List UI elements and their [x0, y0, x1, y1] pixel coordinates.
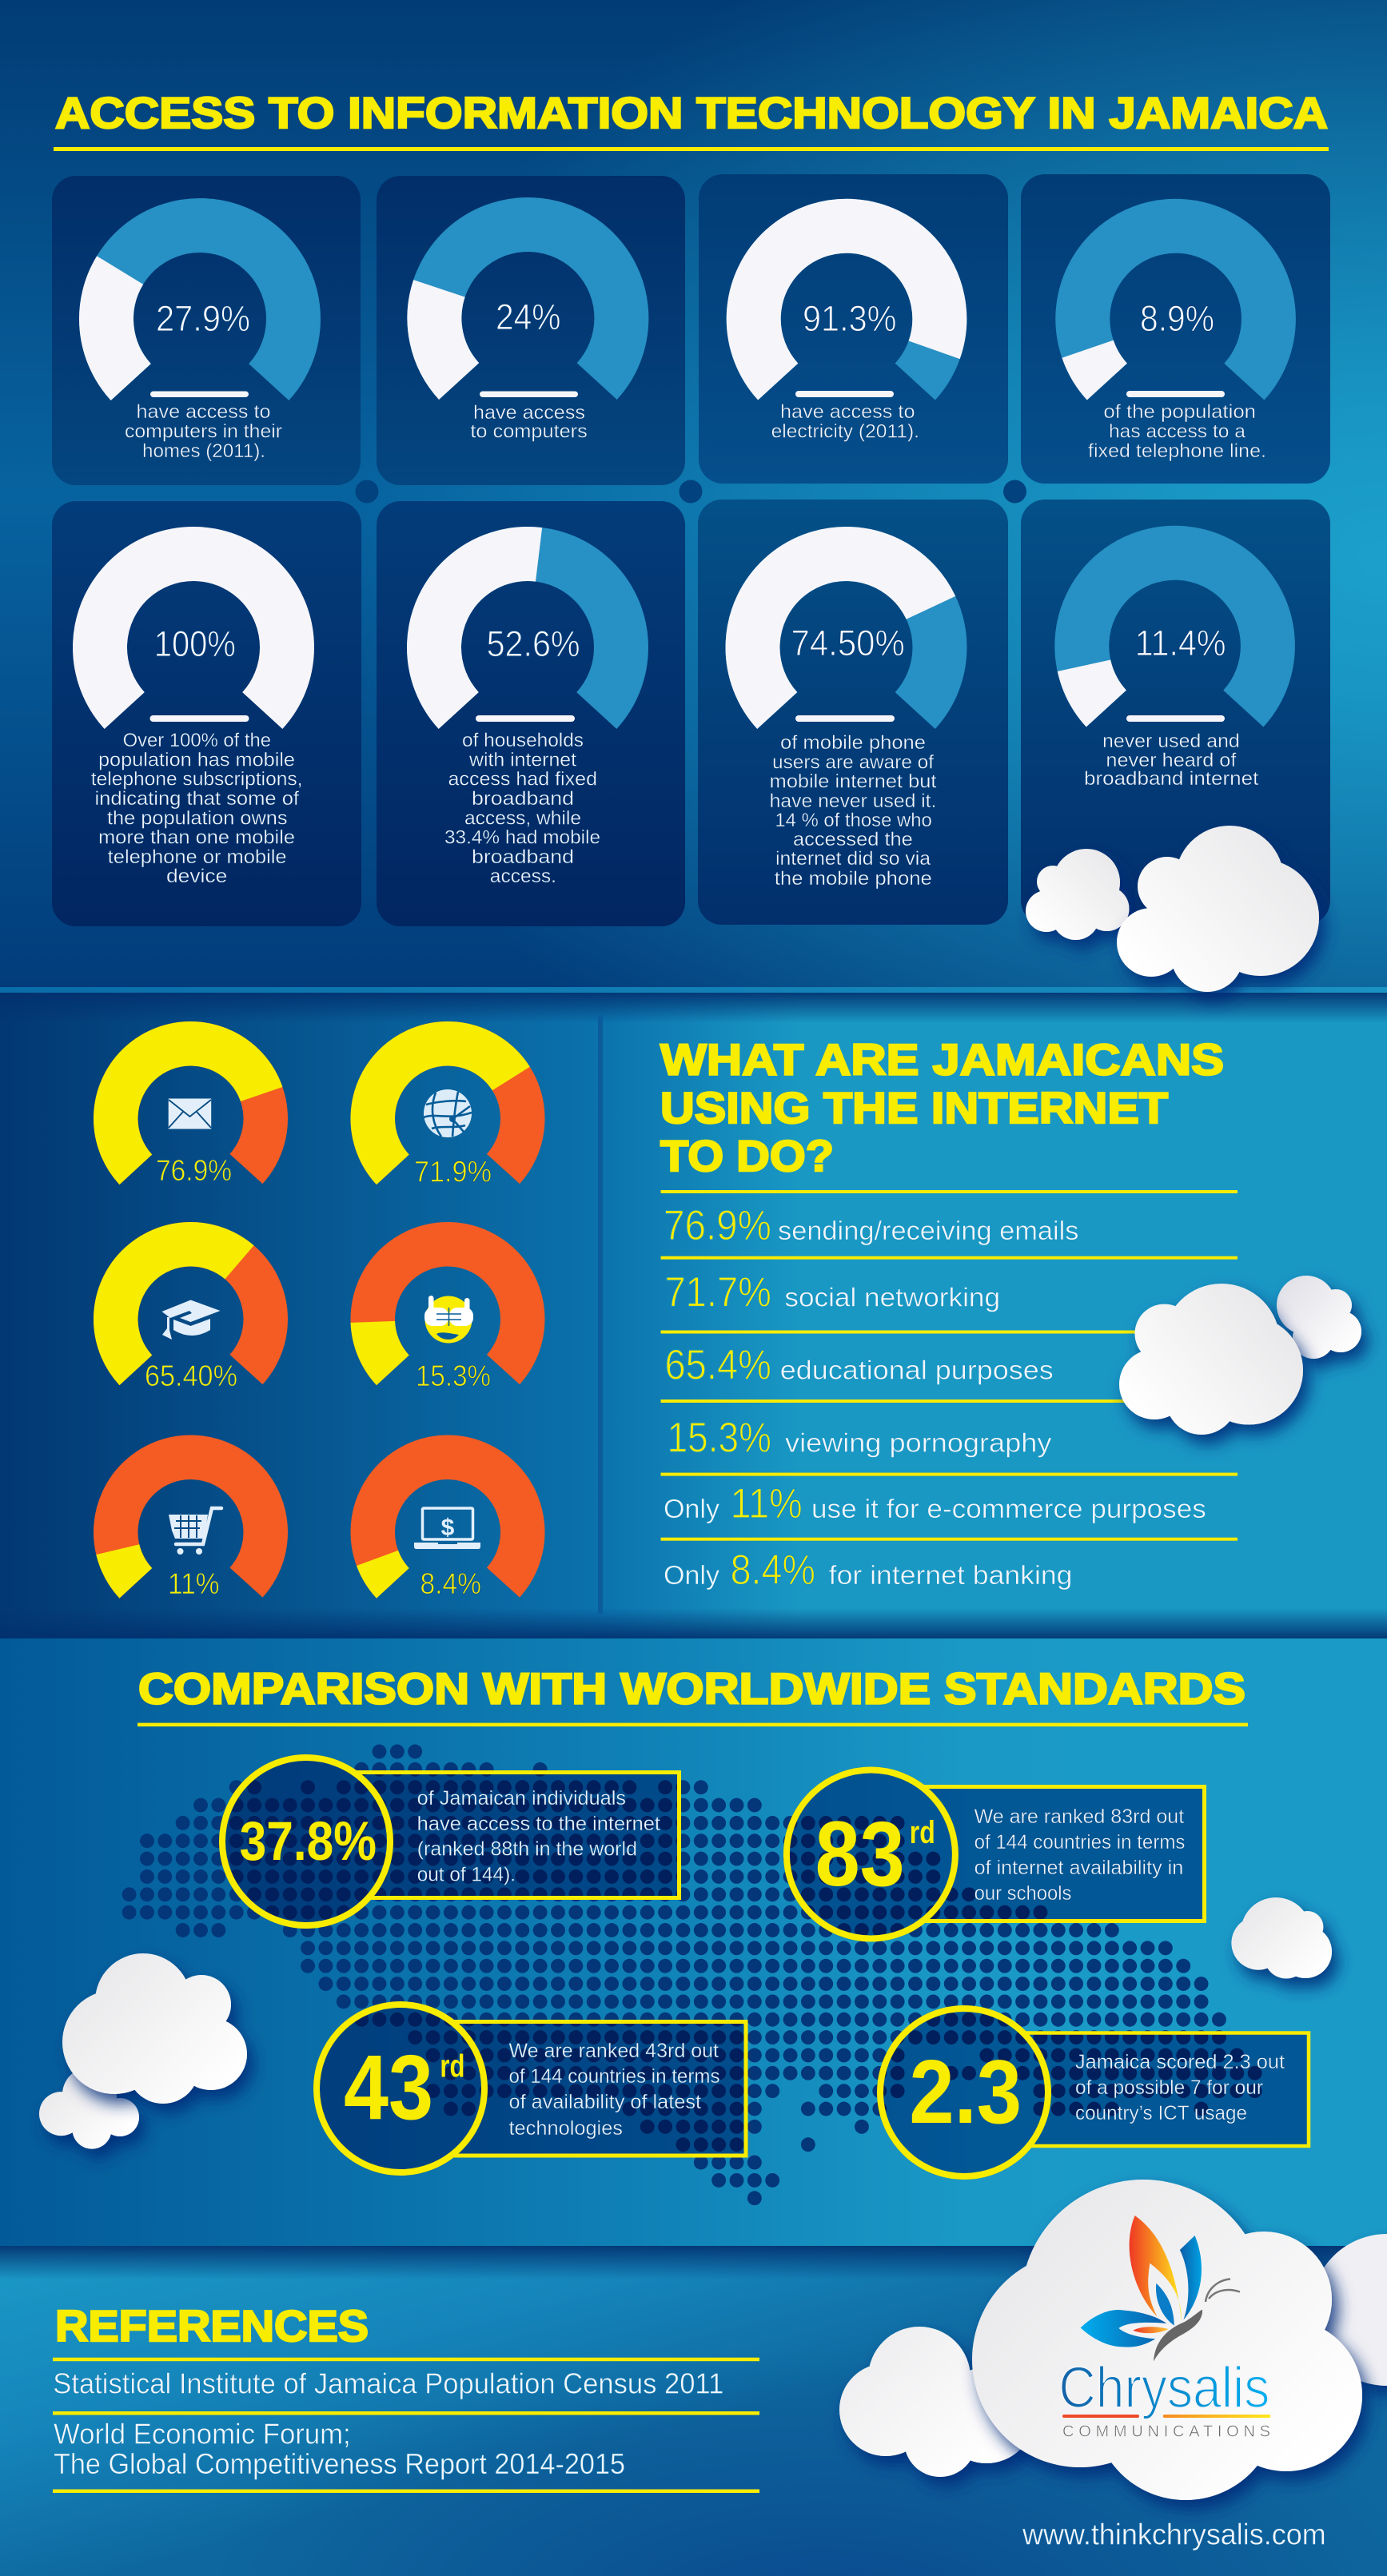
caption: 14 % of those who	[775, 810, 932, 831]
caption	[770, 732, 937, 890]
row: 71.7% social networking	[665, 1268, 1000, 1316]
callout text: have access to the internet	[417, 1813, 660, 1835]
row: 76.9% emails: 76.9%	[664, 1202, 771, 1249]
row: 65.4% educational purposes: educational purposes	[780, 1356, 1054, 1385]
value: 76.9%	[156, 1154, 232, 1187]
callout text: technologies	[508, 2117, 623, 2140]
row: 15.3% viewing pornography: 15.3%	[668, 1415, 771, 1461]
list: internet uses	[660, 1190, 1238, 1594]
caption: have access to	[136, 401, 270, 423]
caption	[125, 401, 282, 462]
cloud: large, left of comparison	[62, 1953, 247, 2104]
callout text	[974, 1806, 1185, 1905]
caption: computers in their	[125, 421, 282, 443]
caption: access, while	[464, 807, 581, 829]
row: 65.4% educational purposes	[665, 1342, 1054, 1389]
heading: what are Jamaicans using the internet to do: WHAT ARE JAMAICANS	[660, 1035, 1224, 1085]
callout text: of Jamaican individuals	[417, 1787, 626, 1810]
caption	[91, 730, 303, 887]
value: 52.6%: 52.6%	[487, 623, 580, 664]
caption: broadband internet	[1084, 768, 1259, 790]
gauge: 8.4% internet banking	[342, 1427, 553, 1638]
row: 15.3% viewing pornography: viewing pornography	[785, 1427, 1052, 1458]
panel: 24% computers	[377, 176, 685, 485]
icon: laptop with dollar	[414, 1508, 480, 1549]
caption: have never used it.	[770, 790, 936, 812]
gauge: 27.9%	[68, 187, 332, 451]
value: 71.9%	[414, 1156, 492, 1188]
panel: 52.6% fixed broadband	[377, 501, 685, 926]
callout: 83rd schools: rd	[910, 1815, 935, 1850]
connector dots between cards	[355, 480, 1026, 504]
callout: 43rd latest technologies: 43	[344, 2037, 433, 2139]
row: 71.7% social networking: social networking	[784, 1282, 1000, 1312]
website url: www.thinkchrysalis.com	[1022, 2518, 1326, 2551]
row: only 8.4% internet banking: 8.4%	[731, 1547, 815, 1594]
callout: 37.8% internet access	[219, 1754, 681, 1929]
cloud: left of logo cloud	[839, 2327, 1034, 2477]
panel: 27.9% computers in homes	[52, 176, 361, 485]
callout text: of a possible 7 for our	[1075, 2076, 1263, 2099]
references list	[53, 2358, 759, 2493]
caption: of households	[462, 730, 584, 751]
icon: hands over globe	[424, 1296, 473, 1343]
caption: never used and	[1102, 731, 1240, 752]
callout text	[1075, 2051, 1285, 2124]
value: 11.4%: 11.4%	[1135, 623, 1226, 663]
heading: what are Jamaicans using the internet to do	[660, 1035, 1224, 1181]
row: only 8.4% internet banking	[664, 1547, 1073, 1594]
callout: 2.3 ICT usage	[877, 2005, 1310, 2180]
row: 76.9% emails	[664, 1202, 1079, 1249]
caption	[1088, 401, 1266, 462]
panel: 100% mobile subscriptions	[52, 501, 361, 926]
gauge: 52.6%	[396, 516, 660, 779]
callout: 43rd latest technologies: rd	[440, 2049, 464, 2084]
references list: World Economic Forum;	[54, 2418, 351, 2451]
references list: Statistical Institute of Jamaica Population Census 2011	[53, 2367, 723, 2399]
value: 100%: 100%	[154, 623, 236, 664]
callout text: of 144 countries in terms	[974, 1831, 1185, 1853]
gauge: 76.9% email	[85, 1013, 297, 1224]
callout text: (ranked 88th in the world	[417, 1838, 637, 1861]
gauge: 11% e-commerce	[85, 1427, 297, 1638]
caption: more than one mobile	[98, 827, 295, 849]
value: 24%: 24%	[496, 297, 561, 337]
cloud: small, left of comparison	[39, 2068, 139, 2149]
caption: access had fixed	[448, 769, 597, 790]
cloud: large, bottom of access section	[1117, 826, 1319, 992]
caption: fixed telephone line.	[1088, 440, 1266, 462]
row: 65.4% educational purposes: 65.4%	[665, 1342, 771, 1389]
callout: 83rd schools	[783, 1766, 1206, 1942]
caption	[771, 401, 919, 442]
caption: homes (2011).	[142, 440, 265, 462]
callout text: of internet availability in	[974, 1857, 1183, 1879]
icon: envelope	[169, 1098, 211, 1129]
cloud: small, internet section	[1277, 1276, 1361, 1359]
value: 15.3%	[416, 1360, 491, 1392]
caption: indicating that some of	[94, 788, 299, 810]
panel: 11.4% never used broadband	[1021, 500, 1330, 925]
caption: population has mobile	[98, 749, 295, 770]
logo wordmark: Chrysalis	[1058, 2356, 1269, 2420]
callout: 37.8% internet access: 37.8%	[240, 1810, 377, 1872]
gauge: 15.3% pornography	[342, 1213, 553, 1425]
title: access to information technology: ACCESS TO INFORMATION TECHNOLOGY IN JAMAICA	[55, 88, 1328, 137]
value: 74.50%: 74.50%	[791, 623, 905, 663]
value: 8.4%	[420, 1567, 481, 1600]
caption	[470, 402, 588, 443]
caption: has access to a	[1109, 420, 1246, 442]
row: only 11% e-commerce: 11%	[731, 1480, 803, 1527]
gauge: 24%	[396, 186, 660, 450]
caption: broadband	[472, 788, 574, 810]
caption	[444, 730, 600, 887]
callout text: of 144 countries in terms	[508, 2065, 719, 2088]
caption: mobile internet but	[770, 770, 937, 793]
gauge: 100%	[62, 516, 325, 779]
row: only 11% e-commerce: use it for e-commerce purposes	[811, 1494, 1206, 1523]
logo: Chrysalis Communications: COMMUNICATIONS	[1062, 2423, 1270, 2441]
caption: the mobile phone	[775, 868, 932, 890]
caption: of mobile phone	[780, 732, 926, 754]
caption: to computers	[470, 421, 588, 443]
callout text	[508, 2040, 719, 2140]
heading: what are Jamaicans using the internet to do: TO DO?	[660, 1131, 834, 1181]
value: 91.3%: 91.3%	[803, 298, 897, 339]
caption: device	[166, 866, 227, 887]
caption: with internet	[468, 749, 576, 770]
caption: Over 100% of the	[123, 730, 271, 751]
callout: 43rd latest technologies	[313, 2001, 748, 2176]
map: dotted Jamaica	[130, 1752, 1255, 2198]
caption: broadband	[472, 846, 574, 868]
cloud: small, right of comparison	[1231, 1897, 1332, 1979]
cloud: right behind logo cloud	[1311, 2234, 1387, 2386]
callout text: We are ranked 83rd out	[974, 1806, 1184, 1828]
icon: laptop with dollar: $	[441, 1515, 455, 1541]
gauge: 65.40% education	[85, 1213, 297, 1425]
gauge: 11.4%	[1043, 515, 1306, 777]
row: 71.7% social networking: 71.7%	[665, 1268, 771, 1316]
caption: the population owns	[107, 807, 288, 829]
caption: telephone or mobile	[108, 846, 287, 868]
row: only 8.4% internet banking: Only	[664, 1560, 720, 1590]
value: 8.9%: 8.9%	[1140, 298, 1214, 339]
caption: users are aware of	[772, 751, 934, 774]
caption: access.	[490, 866, 556, 887]
callout: 2.3 ICT usage: 2.3	[909, 2041, 1022, 2142]
caption: never heard of	[1106, 750, 1237, 771]
gauge: 71.9% social networking	[342, 1013, 553, 1224]
caption: have access	[473, 402, 585, 424]
cloud: logo cloud	[972, 2180, 1362, 2500]
callout text: Jamaica scored 2.3 out	[1075, 2051, 1285, 2073]
caption: of the population	[1103, 401, 1256, 423]
callout text: of availability of latest	[508, 2091, 701, 2113]
heading: comparison with worldwide standards: COMPARISON WITH WORLDWIDE STANDARDS	[138, 1664, 1246, 1714]
callout text: our schools	[974, 1882, 1071, 1905]
panel: 74.50% mobile internet awareness	[698, 500, 1008, 925]
caption: telephone subscriptions,	[91, 769, 303, 790]
caption: internet did so via	[775, 848, 931, 870]
caption: 33.4% had mobile	[444, 827, 600, 849]
callout text: country’s ICT usage	[1075, 2102, 1247, 2124]
icon: graduation cap	[161, 1300, 221, 1340]
icon: shopping cart	[169, 1508, 221, 1555]
value: 65.40%	[145, 1360, 237, 1392]
panel: 91.3% electricity	[699, 174, 1008, 484]
icon: butterfly	[1081, 2216, 1240, 2361]
gauge: 74.50%	[714, 516, 978, 779]
references list: The Global Competitiveness Report 2014-2015	[54, 2447, 625, 2480]
gauge: 8.9%	[1044, 188, 1307, 450]
callout: 83rd schools: 83	[815, 1803, 905, 1905]
row: only 11% e-commerce	[664, 1480, 1206, 1527]
icon: network globe	[424, 1089, 472, 1137]
caption: accessed the	[793, 829, 913, 850]
logo: Chrysalis Communications	[1058, 2216, 1270, 2441]
caption	[1084, 731, 1259, 790]
cloud: small, bottom of access section	[1026, 849, 1129, 940]
row: 15.3% viewing pornography	[668, 1415, 1052, 1461]
gauge: 91.3%	[715, 188, 978, 450]
caption: have access to	[780, 401, 915, 423]
caption: electricity (2011).	[771, 420, 919, 442]
callout text: We are ranked 43rd out	[508, 2040, 719, 2062]
cloud: large, internet section	[1119, 1284, 1303, 1435]
row: only 11% e-commerce: Only	[664, 1494, 720, 1523]
callout text: out of 144).	[417, 1864, 516, 1886]
value: 27.9%: 27.9%	[156, 298, 250, 339]
callout text	[417, 1787, 660, 1886]
heading: what are Jamaicans using the internet to do: USING THE INTERNET	[660, 1083, 1168, 1133]
row: only 8.4% internet banking: for internet banking	[829, 1560, 1073, 1590]
heading: references: REFERENCES	[55, 2301, 369, 2351]
panel: 8.9% fixed telephone line	[1021, 174, 1330, 484]
row: 76.9% emails: sending/receiving emails	[778, 1216, 1079, 1245]
value: 11%	[168, 1567, 219, 1600]
